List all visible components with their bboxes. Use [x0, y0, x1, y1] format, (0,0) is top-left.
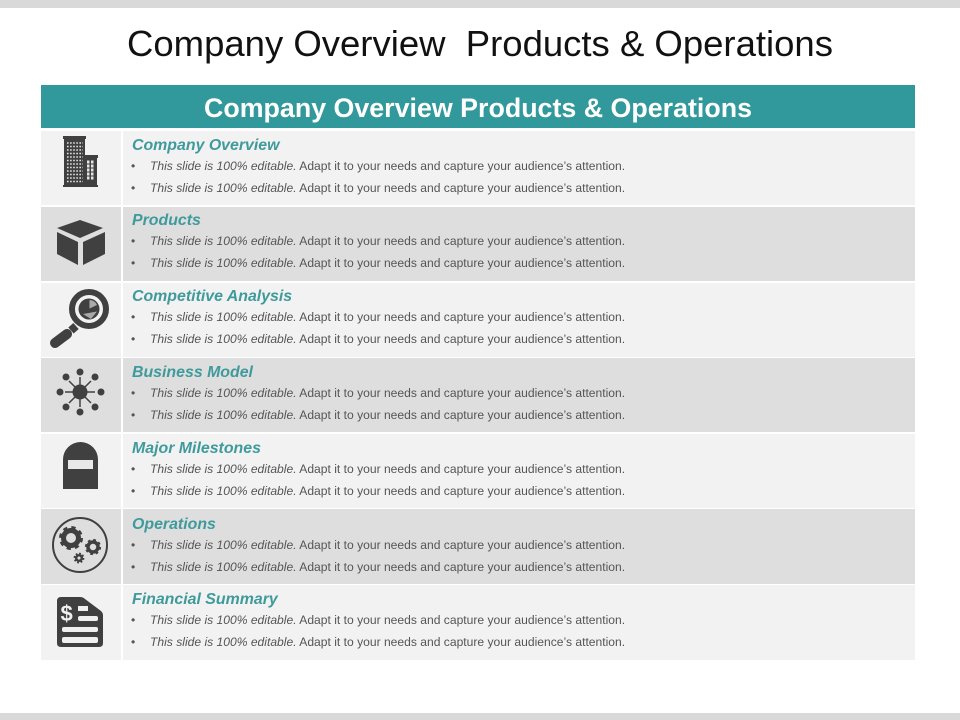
row heading: Company Overview [132, 137, 280, 154]
bullet: This slide is 100% editable. Adapt it to your needs and capture your audience’s attention. [150, 159, 625, 173]
title: Company Overview Products & Operations [127, 23, 833, 64]
bullet: This slide is 100% editable. Adapt it to your needs and capture your audience’s attention. [150, 635, 625, 649]
bullet: This slide is 100% editable. Adapt it to your needs and capture your audience’s attention. [150, 332, 625, 346]
icon: gears in circle [41, 509, 121, 584]
bullet: This slide is 100% editable. Adapt it to your needs and capture your audience’s attention. [150, 560, 625, 574]
row: operations [41, 509, 915, 584]
row heading: Business Model [132, 364, 253, 381]
row: major milestones [41, 434, 915, 508]
bullet: This slide is 100% editable. Adapt it to your needs and capture your audience’s attention. [150, 310, 625, 324]
icon: milestone [41, 434, 121, 508]
row: business model [41, 358, 915, 432]
bullet: This slide is 100% editable. Adapt it to your needs and capture your audience’s attention. [150, 234, 625, 248]
bullet: This slide is 100% editable. Adapt it to your needs and capture your audience’s attention. [150, 181, 625, 195]
row heading: Competitive Analysis [132, 288, 292, 305]
row text [123, 283, 915, 357]
row text [123, 585, 915, 660]
bullet: This slide is 100% editable. Adapt it to your needs and capture your audience’s attention. [150, 256, 625, 270]
row text [123, 358, 915, 432]
table header: Company Overview Products & Operations [204, 93, 752, 123]
row text [123, 131, 915, 205]
icon: financial document [41, 585, 121, 660]
bullet: This slide is 100% editable. Adapt it to your needs and capture your audience’s attention. [150, 408, 625, 422]
bullet: This slide is 100% editable. Adapt it to your needs and capture your audience’s attention. [150, 386, 625, 400]
row heading: Major Milestones [132, 440, 261, 457]
row text [123, 509, 915, 584]
row: financial summary [41, 585, 915, 660]
icon: box [41, 207, 121, 281]
row text [123, 434, 915, 508]
row: company overview [41, 131, 915, 205]
row heading: Financial Summary [132, 591, 278, 608]
icon: building [41, 131, 121, 205]
bullet: This slide is 100% editable. Adapt it to your needs and capture your audience’s attention. [150, 462, 625, 476]
row: competitive analysis [41, 283, 915, 357]
row heading: Operations [132, 516, 216, 533]
icon: hub network [41, 358, 121, 432]
table header [41, 85, 915, 128]
bullet: This slide is 100% editable. Adapt it to your needs and capture your audience’s attention. [150, 538, 625, 552]
row heading: Products [132, 212, 201, 229]
icon: financial document: $ [60, 601, 73, 626]
bullet: This slide is 100% editable. Adapt it to your needs and capture your audience’s attention. [150, 484, 625, 498]
row: products [41, 207, 915, 281]
bullet: This slide is 100% editable. Adapt it to your needs and capture your audience’s attention. [150, 613, 625, 627]
row text [123, 207, 915, 281]
icon: magnifier with pie chart [41, 283, 121, 357]
